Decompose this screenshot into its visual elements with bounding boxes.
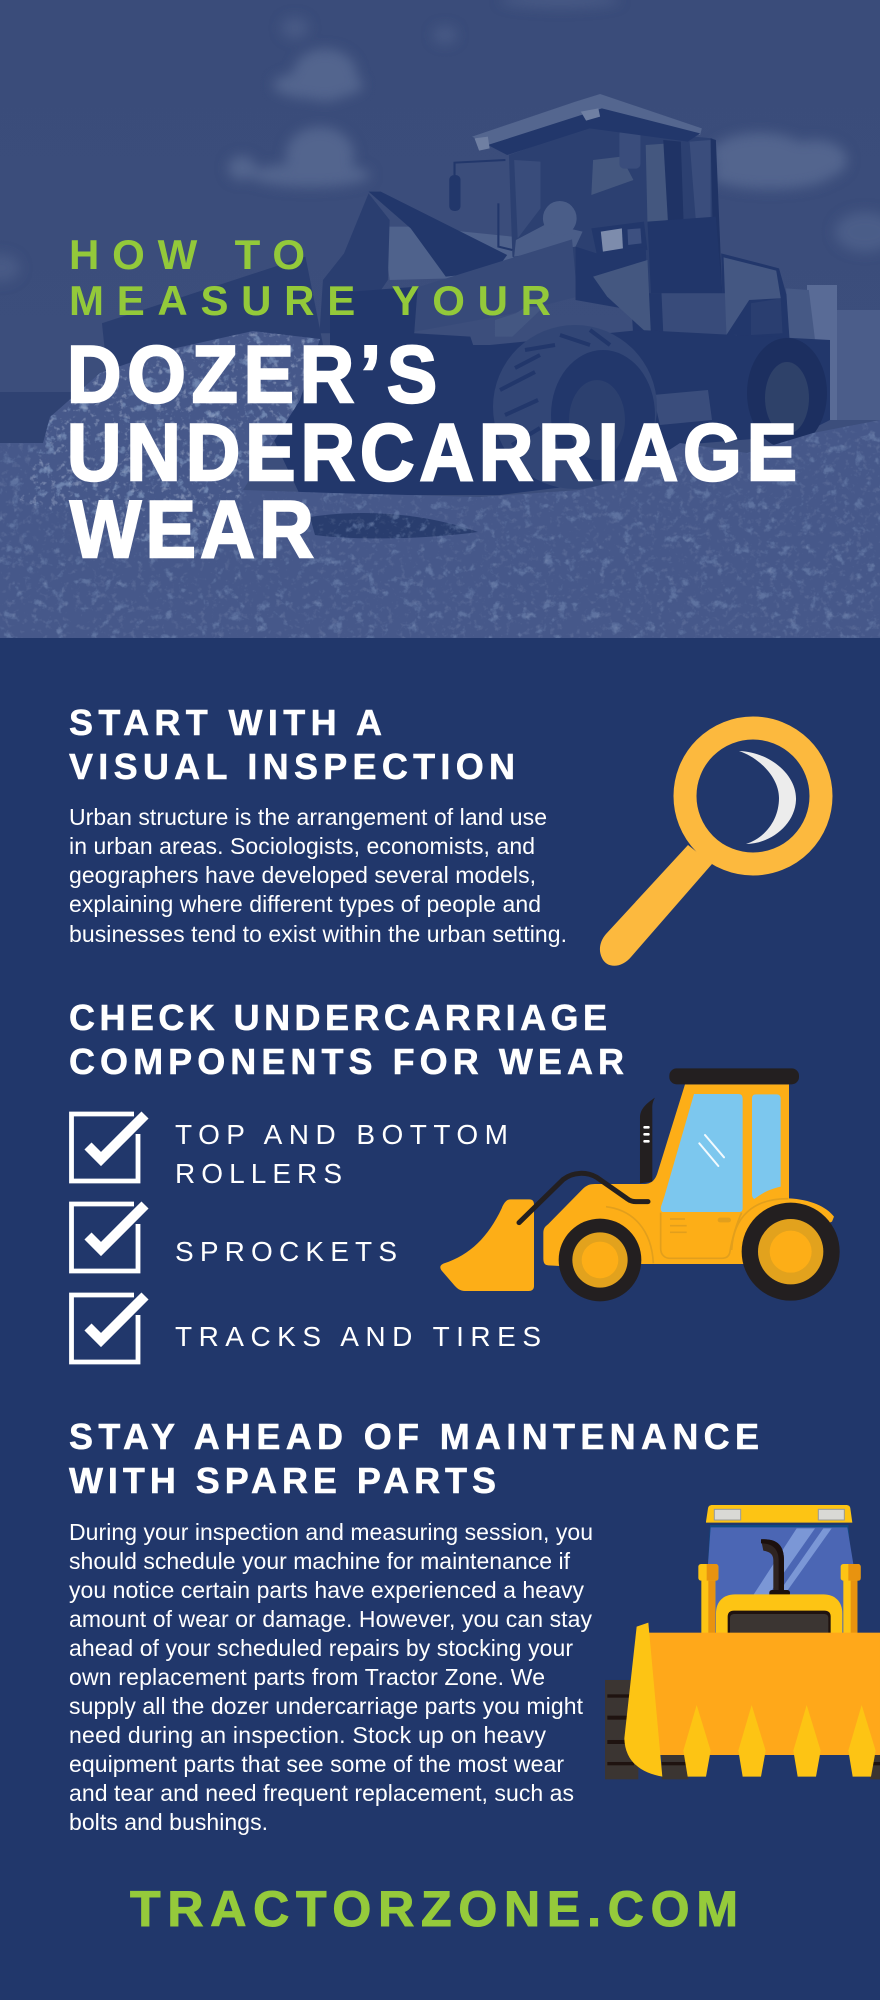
- background buildings: [807, 285, 837, 420]
- body text: visual inspection: explaining where different types of people and: [69, 891, 541, 917]
- body text: visual inspection: businesses tend to exist within the urban setting.: [69, 921, 567, 947]
- body text: spare parts: need during an inspection. Stock up on heavy: [69, 1722, 546, 1748]
- title: green kicker: [69, 231, 551, 324]
- icon: yellow wheel loader: [440, 1068, 840, 1301]
- checklist item: top and bottom rollers: TOP AND BOTTOM: [175, 1119, 508, 1150]
- rear wheel: [747, 338, 827, 448]
- body text: visual inspection: Urban structure is the arrangement of land use: [69, 804, 547, 830]
- body text: spare parts: and tear and need frequent replacement, such as: [69, 1780, 574, 1806]
- section: spare parts: [69, 1416, 880, 1835]
- body text: spare parts: supply all the dozer undercarriage parts you might: [69, 1693, 584, 1719]
- loader, coordinates from reference crop: [102, 94, 828, 427]
- cab: [509, 127, 721, 297]
- title: white main heading: UNDERCARRIAGE: [67, 406, 797, 498]
- title: green kicker: MEASURE YOUR: [69, 277, 551, 324]
- title: [67, 231, 797, 575]
- background trees and field: [0, 392, 120, 444]
- body text: visual inspection: geographers have developed several models,: [69, 862, 536, 888]
- body text: spare parts: [69, 1519, 593, 1835]
- heading: stay ahead of maintenance: [69, 1416, 759, 1501]
- body text: spare parts: amount of wear or damage. However, you can stay: [69, 1606, 592, 1632]
- title: white main heading: DOZER’S: [67, 328, 437, 420]
- heading: check undercarriage components: COMPONENTS FOR WEAR: [69, 1041, 624, 1082]
- ground mound: [0, 331, 880, 638]
- heading: stay ahead of maintenance: WITH SPARE PARTS: [69, 1460, 496, 1501]
- heading: stay ahead of maintenance: STAY AHEAD OF MAINTENANCE: [69, 1416, 759, 1457]
- heading: start with a visual inspection: [69, 702, 515, 787]
- checklist item: top and bottom rollers: [72, 1114, 508, 1189]
- body text: visual inspection: in urban areas. Sociologists, economists, and: [69, 833, 535, 859]
- body text: visual inspection: [69, 804, 567, 947]
- hero photo: wheel loader on dirt pile, navy duotone: [0, 0, 880, 638]
- title: green kicker: HOW TO: [69, 231, 305, 278]
- icon: yellow bulldozer front view: [605, 1505, 880, 1779]
- dirt pile texture: [20, 332, 320, 558]
- body text: spare parts: bolts and bushings.: [69, 1809, 268, 1835]
- heading: check undercarriage components: [69, 997, 624, 1082]
- dark chassis: [255, 330, 830, 495]
- shadow below bucket: [310, 513, 478, 538]
- bright gap behind arm: [383, 227, 516, 280]
- heading: check undercarriage components: CHECK UNDERCARRIAGE: [69, 997, 607, 1038]
- checklist item: top and bottom rollers: ROLLERS: [175, 1158, 342, 1189]
- body: [576, 247, 828, 427]
- section: undercarriage components: [69, 997, 840, 1362]
- body text: spare parts: own replacement parts from Tractor Zone. We: [69, 1664, 545, 1690]
- roof: [472, 94, 702, 145]
- checklist item: sprockets: SPROCKETS: [175, 1236, 397, 1267]
- body text: spare parts: During your inspection and measuring session, you: [69, 1519, 593, 1545]
- body text: spare parts: should schedule your machine for maintenance if: [69, 1548, 571, 1574]
- bucket: [102, 257, 330, 423]
- front wheel: [493, 325, 657, 489]
- lamp cluster: [591, 222, 647, 253]
- heading: start with a visual inspection: START WITH A: [69, 702, 382, 743]
- body text: spare parts: you notice certain parts have experienced a heavy: [69, 1577, 584, 1603]
- title: white main heading: [67, 328, 797, 575]
- body text: spare parts: equipment parts that see some of the most wear: [69, 1751, 564, 1777]
- section: visual inspection: [69, 702, 821, 966]
- checklist item: tracks and tires: TRACKS AND TIRES: [175, 1321, 541, 1352]
- icon: magnifying glass: [600, 728, 821, 966]
- heading: start with a visual inspection: VISUAL INSPECTION: [69, 746, 515, 787]
- boom panel: [414, 239, 577, 332]
- lift frame: [319, 193, 390, 333]
- checklist item: tracks and tires: [72, 1295, 541, 1362]
- body text: spare parts: ahead of your scheduled repairs by stocking your: [69, 1635, 573, 1661]
- footer: website: TRACTORZONE.COM: [130, 1881, 738, 1937]
- title: white main heading: WEAR: [70, 483, 314, 575]
- checklist item: sprockets: [72, 1204, 397, 1271]
- dirt texture: [0, 330, 880, 638]
- front axle block: [653, 390, 712, 425]
